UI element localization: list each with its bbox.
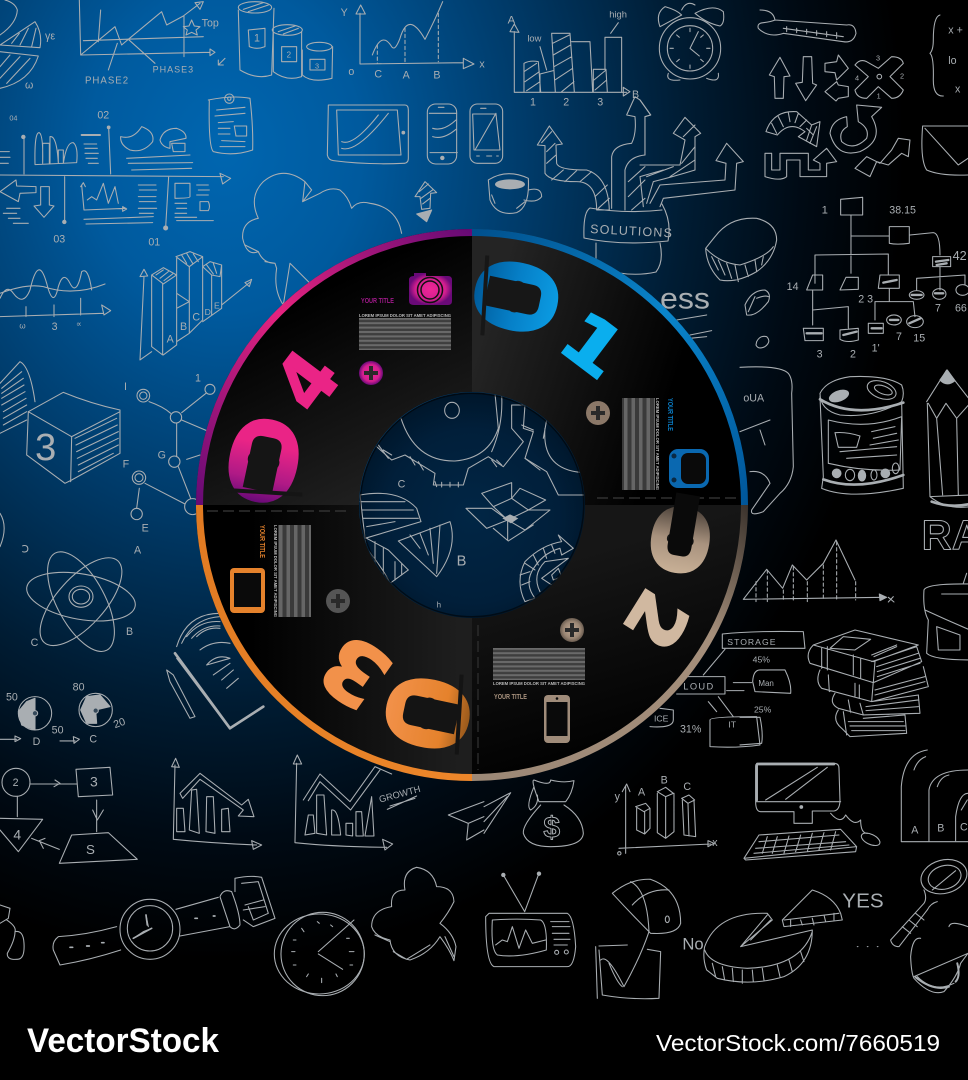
diagram: flowchart — [0, 767, 137, 863]
number 01: 0 — [465, 244, 566, 353]
number 03: 0 — [378, 657, 479, 766]
chart: 3D bars A B C: B — [661, 774, 668, 786]
icon: gear — [377, 393, 585, 495]
icon: pencil — [927, 370, 968, 507]
icon: disc pie — [706, 218, 777, 282]
chart: rising bars with growth arrow: GROWTH — [378, 784, 422, 805]
chart: organisation tree: 66 — [955, 303, 967, 315]
chart: 3D bars A to E: A — [167, 334, 175, 346]
chart: disc pies with labels: 80 — [73, 682, 85, 694]
doodles: top left business sketches — [0, 0, 402, 360]
chart: hatched bars: B — [632, 89, 639, 101]
timeline infographic sketch — [0, 110, 231, 249]
icon: molecule network: I — [124, 381, 127, 393]
icon: open book and pen — [0, 513, 263, 728]
labels: percentages — [733, 655, 791, 745]
panel: quadrant 02 tan — [472, 493, 748, 781]
chart: wave graph — [0, 270, 111, 333]
labels: percentages: Man — [758, 679, 774, 688]
icon: X shape: 4 — [855, 74, 859, 83]
number 02: 2 — [606, 575, 705, 664]
text block: striped lines — [622, 398, 660, 490]
icon: solutions box: SOLUTIONS — [590, 222, 674, 240]
chart: phase line graph: Top — [202, 18, 219, 30]
icon: money bag — [523, 780, 583, 847]
text block: striped lines: LOREM IPSUM DOLOR SIT AMET ADIPISCING — [359, 313, 451, 318]
chart: hatched bars — [508, 9, 639, 108]
text block: striped lines — [273, 525, 311, 617]
icon: curved arrows — [765, 105, 910, 179]
icon: small up arrow — [415, 182, 437, 222]
icon: formula bracket: x + — [948, 24, 963, 36]
icon: small pebbles — [745, 290, 769, 348]
footer: image id: VectorStock.com/7660519 — [656, 1030, 940, 1056]
icon: paper plane right — [484, 793, 511, 833]
chart: hatched bars: 2 — [563, 96, 569, 108]
diagram: cloud and IT boxes: IT — [728, 720, 737, 730]
icon: paper plane left — [448, 802, 484, 840]
icon: formula bracket: x — [955, 84, 961, 96]
chart: organisation tree: 2 — [850, 348, 856, 360]
chart: phase line graph — [79, 0, 225, 86]
icon: mouse over checkbox — [596, 879, 681, 999]
icon: arched blocks A B C: C — [960, 822, 968, 834]
icon: pie chart top left: ω — [25, 79, 33, 91]
icon: formula bracket: lo — [948, 55, 957, 67]
chart: organisation tree: 15 — [913, 333, 925, 345]
labels: percentages: 25% — [754, 705, 772, 715]
icon: solutions arrows left and centre — [537, 97, 651, 210]
icon: direction arrows — [769, 55, 848, 101]
chart: 3D bars A to E — [140, 252, 252, 360]
icon: atom: Ↄ — [22, 544, 30, 556]
icon: X shape: 1 — [877, 91, 881, 100]
diagram: flowchart: 3 — [90, 774, 98, 790]
icon: plus button — [560, 618, 584, 642]
chart: disc pies with labels — [0, 682, 127, 748]
icon: eye glasses — [911, 923, 968, 993]
icon: money bag: $ — [543, 811, 560, 844]
timeline infographic sketch: 03 — [53, 233, 65, 245]
doodles: left middle sketches — [0, 362, 263, 748]
chart: phase line graph: PHASE3 — [153, 65, 194, 75]
icon: solutions arrows right — [640, 100, 743, 207]
icon: arched blocks A B C — [901, 750, 968, 842]
labels: percentages: 45% — [753, 655, 770, 665]
icon: cylinders 1 2 3: 3 — [315, 61, 319, 70]
chart: disc pies with labels: C — [89, 734, 97, 746]
chart: 3D bars A to E: D — [205, 307, 211, 317]
icon: molecule network — [123, 373, 215, 556]
icon: clipboard — [208, 94, 253, 154]
doodles: top centre sketches — [327, 2, 651, 222]
panel: quadrant 01 blue — [465, 229, 748, 505]
text block: striped lines — [493, 648, 585, 686]
doodles: cloud storage diagram — [650, 631, 805, 747]
chart: line graph with axes: B — [433, 70, 440, 82]
icon: X shape: 2 — [900, 72, 904, 81]
icon: stacked books — [808, 630, 928, 737]
chart: line graph with axes — [341, 2, 485, 82]
number 03 — [303, 613, 479, 766]
chart: organisation tree — [787, 197, 968, 360]
icon: pie slices — [360, 479, 466, 610]
panel: centre circle doodles — [359, 392, 585, 618]
doodles: bottom left sketches — [0, 755, 484, 996]
chart: line graph with axes: C — [374, 68, 382, 80]
panel: quadrant 03 orange — [196, 505, 479, 781]
doodles: top right sketches — [640, 3, 968, 360]
chart: disc pies with labels: 50 — [52, 724, 64, 736]
chart: organisation tree: 1' — [872, 343, 880, 355]
icon: envelope — [922, 126, 968, 175]
text block: striped lines: LOREM IPSUM DOLOR SIT AMET ADIPISCING — [655, 398, 660, 490]
icon: molecule network: 1 — [195, 373, 201, 385]
heading fragment: ess word: ess — [660, 282, 710, 315]
number 01 — [465, 244, 640, 396]
icon: television — [486, 872, 576, 967]
chart: falling bars — [172, 758, 262, 849]
chart: line graph with axes: o — [348, 66, 354, 78]
icon: arched blocks A B C: B — [937, 823, 944, 835]
icon: 3D cubes: 3 — [35, 426, 56, 469]
text: title label: YOUR TITLE — [494, 694, 527, 701]
chart: organisation tree: 3 — [817, 348, 823, 360]
icon: computer with keyboard and mouse — [744, 763, 882, 860]
chart: 3D bars A B C: A — [638, 787, 646, 799]
heading fragment: ess word — [660, 282, 712, 338]
chart: organisation tree: 1 — [822, 204, 828, 216]
icon: cylinders 1 2 3: 2 — [287, 51, 292, 60]
icon: X shape: 3 — [876, 54, 880, 63]
icon: solutions box — [584, 204, 674, 274]
diagram: flowchart: 2 — [13, 777, 19, 789]
number 02 — [606, 493, 724, 664]
number 03: 3 — [303, 613, 409, 728]
chart: organisation tree: 2 3 — [858, 294, 873, 306]
icon: tablet — [327, 105, 408, 164]
timeline infographic sketch: 04 — [9, 114, 17, 123]
icon: fragment sketch — [0, 905, 24, 959]
icon: tablet — [230, 568, 265, 613]
chart: disc pies with labels: 20 — [112, 716, 127, 731]
doodles: right middle sketches — [733, 367, 968, 745]
diagram: cloud and IT boxes: LOUD — [683, 681, 715, 691]
icon: spiral shell — [520, 535, 573, 602]
icon: pie slices: C — [398, 479, 406, 491]
diagram: flowchart: 4 — [13, 826, 21, 842]
icon: atom: C — [31, 637, 39, 649]
icon: X shape — [855, 54, 904, 100]
icon: pie chart top left — [0, 0, 55, 91]
chart: 3D bars A B C: x — [712, 837, 718, 849]
icon: cloud — [243, 173, 402, 305]
number 02: 0 — [634, 500, 724, 579]
icon: open box — [466, 483, 550, 541]
chart: mountain line chart — [743, 540, 894, 602]
icon: atom: B — [126, 626, 133, 638]
icon: 3D cubes — [0, 362, 120, 483]
icon: speech bubble: oUA — [743, 393, 765, 405]
number 04 — [211, 335, 358, 512]
chart: rising bars with growth arrow — [293, 755, 422, 850]
panel: quadrant 04 pink — [196, 229, 472, 512]
icon: speech bubble — [740, 367, 793, 514]
diagram: cloud and IT boxes — [650, 631, 805, 747]
icon: camera — [409, 273, 452, 305]
chart: 3D bars A B C: C — [683, 781, 691, 793]
icon: molecule network: F — [123, 458, 130, 470]
chart: disc pies with labels: 50 — [6, 692, 18, 704]
diagram: cloud and IT boxes: STORAGE — [727, 637, 776, 647]
icon: pie slices: h — [437, 601, 441, 610]
text block: striped lines: LOREM IPSUM DOLOR SIT AMET ADIPISCING — [273, 525, 278, 617]
icon: arched blocks A B C: A — [911, 824, 919, 836]
timeline infographic sketch: 02 — [97, 110, 109, 122]
diagram: flowchart: S — [86, 842, 95, 857]
chart: organisation tree: 7 — [935, 303, 941, 315]
icon: coffee cup — [488, 174, 542, 213]
number 04: 4 — [257, 335, 358, 428]
icon: cylinders 1 2 3: 1 — [254, 33, 260, 45]
chart: disc pies with labels: D — [33, 736, 41, 748]
chart: 3D bars A B C: y — [615, 791, 621, 803]
icon: plus button — [326, 589, 350, 613]
chart: hatched bars: A — [508, 14, 516, 26]
timeline infographic sketch: 01 — [148, 237, 160, 249]
chart: line graph with axes: x — [479, 59, 485, 71]
icon: pie slices: B — [457, 554, 466, 570]
chart: wave graph: ∝ — [76, 320, 82, 329]
text: title label: YOUR TITLE — [258, 525, 265, 558]
icon: wrench — [758, 10, 856, 42]
text block: striped lines: LOREM IPSUM DOLOR SIT AMET ADIPISCING — [493, 681, 585, 686]
icon: jar — [924, 573, 968, 660]
icon: molecule network: A — [134, 544, 142, 556]
chart: wave graph: ω — [19, 321, 26, 330]
chart: hatched bars: high — [609, 9, 627, 19]
diagram: cloud and IT boxes: ICE — [654, 714, 669, 724]
footer: VectorStock brand: VectorStock — [27, 1022, 219, 1060]
icon: wrist watch — [53, 876, 275, 965]
icon: wall clock — [274, 912, 364, 996]
chart: organisation tree: 42 — [953, 249, 967, 263]
icon: pie chart with slice — [682, 889, 884, 983]
chart: organisation tree: 14 — [787, 281, 799, 293]
doodles: bottom right sketches — [484, 750, 968, 999]
circle infographic — [196, 229, 748, 781]
icon: pie chart top left: γε — [45, 30, 55, 42]
chart: hatched bars: 3 — [597, 96, 603, 108]
chart: phase line graph: PHASE2 — [85, 75, 129, 86]
chart: 3D bars A to E: C — [192, 312, 200, 324]
diagram: cloud and IT boxes: 31% — [680, 723, 702, 735]
icon: formula bracket — [930, 15, 963, 96]
icon: device — [669, 449, 709, 488]
icon: alarm clock — [658, 3, 724, 80]
chart: 3D bars A B C — [615, 774, 718, 855]
icon: tin can — [820, 376, 903, 494]
number 01: 1 — [544, 296, 640, 396]
chart: organisation tree: 38.15 — [889, 204, 916, 216]
chart: 3D bars A to E: B — [180, 321, 187, 333]
icon: cylinders 1 2 3 — [238, 2, 333, 80]
icon: plus button — [586, 401, 610, 425]
chart: hatched bars: low — [527, 34, 542, 44]
chart: hatched bars: 1 — [530, 96, 536, 108]
icon: atom — [22, 542, 139, 661]
text: title label: YOUR TITLE — [666, 398, 673, 431]
icon: molecule network: G — [158, 449, 166, 461]
text block: striped lines — [359, 313, 451, 350]
chart: line graph with axes: A — [403, 70, 411, 82]
number 04: 0 — [211, 411, 320, 512]
icon: molecule network: E — [142, 523, 149, 535]
icon: pie chart with slice: YES — [842, 889, 884, 912]
chart: organisation tree: 7 — [896, 331, 902, 343]
icon: thought cloud — [372, 867, 456, 961]
icon: plus button — [359, 361, 383, 385]
icon: phones — [427, 104, 503, 164]
chart: wave graph: 3 — [52, 321, 58, 333]
icon: magnifying glass — [891, 855, 968, 947]
text: title label: YOUR TITLE — [361, 298, 394, 305]
chart: 3D bars A to E: E — [214, 300, 220, 310]
icon: smartphone — [544, 695, 570, 743]
chart: line graph with axes: Y — [341, 7, 348, 19]
icon: pie chart with slice: No — [682, 934, 704, 953]
